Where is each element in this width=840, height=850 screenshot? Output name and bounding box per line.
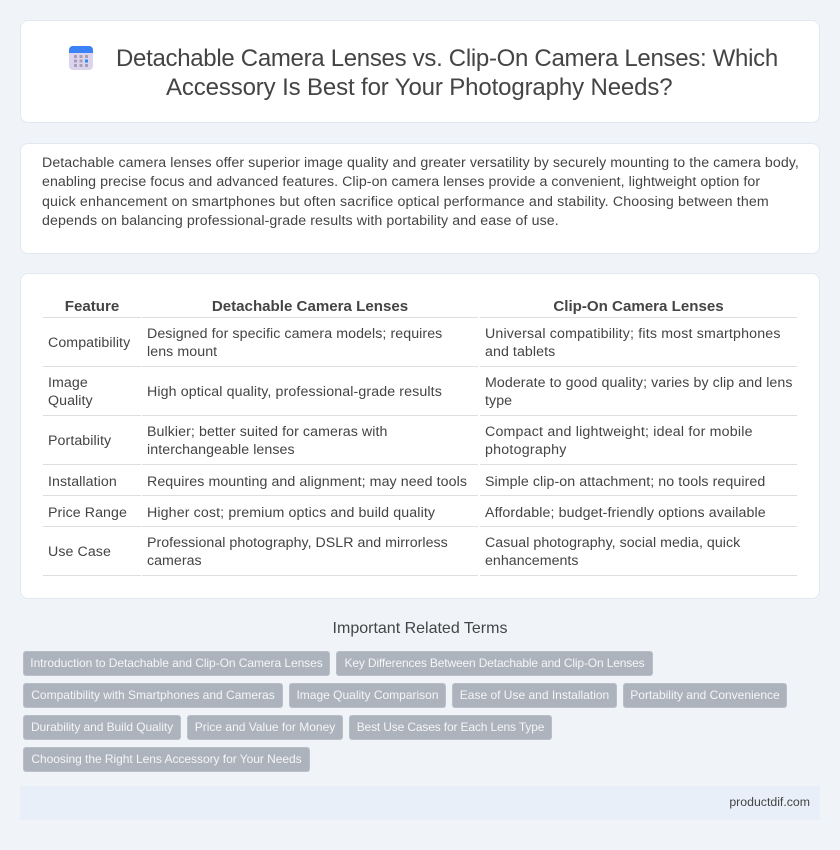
tag bbox=[349, 715, 552, 740]
row: compatibility: Designed for specific camera models; requires bbox=[147, 326, 442, 342]
icon: calendar bbox=[69, 46, 93, 70]
row: use case: Professional photography, DSLR and mirrorless bbox=[147, 535, 448, 551]
row: portability: Bulkier; better suited for cameras with bbox=[147, 424, 387, 440]
table header row: Feature bbox=[65, 298, 119, 315]
comparison table panel bbox=[20, 273, 820, 599]
row: price range bbox=[48, 505, 766, 521]
tag: Ease of Use and Installation bbox=[460, 688, 609, 702]
tag: Durability and Build Quality bbox=[31, 720, 173, 734]
row: image quality bbox=[48, 375, 793, 409]
row: compatibility: Compatibility bbox=[48, 335, 130, 351]
row: image quality: Moderate to good quality; varies by clip and lens bbox=[485, 375, 793, 391]
tag bbox=[23, 683, 283, 708]
row: image quality: Image bbox=[48, 375, 88, 391]
row: use case: Casual photography, social media, quick bbox=[485, 535, 740, 551]
intro text bbox=[42, 155, 799, 229]
row: use case: Use Case bbox=[48, 544, 111, 560]
footer band bbox=[20, 786, 820, 820]
row: price range: Affordable; budget-friendly options available bbox=[485, 505, 766, 521]
title: Detachable Camera Lenses vs. Clip-On Camera Lenses: Which bbox=[116, 45, 778, 72]
tag bbox=[23, 651, 330, 676]
row: portability: Portability bbox=[48, 433, 111, 449]
tag: Compatibility with Smartphones and Cameras bbox=[31, 688, 275, 702]
row: price range: Higher cost; premium optics and build quality bbox=[147, 505, 435, 521]
row: portability bbox=[48, 424, 753, 458]
tag: Portability and Convenience bbox=[630, 688, 780, 702]
row: compatibility: lens mount bbox=[147, 344, 217, 360]
tag: Introduction to Detachable and Clip-On Camera Lenses bbox=[30, 656, 323, 670]
related terms heading: Important Related Terms bbox=[333, 620, 507, 637]
intro text: enabling precise focus and advanced features. Clip-on camera lenses provide a convenient, lightweight option for bbox=[42, 174, 760, 190]
tag bbox=[187, 715, 343, 740]
row: compatibility bbox=[48, 326, 781, 360]
row: installation: Requires mounting and alignment; may need tools bbox=[147, 474, 467, 490]
row: compatibility: and tablets bbox=[485, 344, 555, 360]
intro text: quick enhancement on smartphones but often sacrifice optical performance and stability. Choosing between them bbox=[42, 194, 769, 210]
row: image quality: High optical quality, professional-grade results bbox=[147, 384, 442, 400]
row: portability: interchangeable lenses bbox=[147, 442, 295, 458]
table header row: Clip-On Camera Lenses bbox=[553, 298, 724, 315]
intro text: Detachable camera lenses offer superior image quality and greater versatility by securely mounting to the camera body, bbox=[42, 155, 799, 171]
row: portability: Compact and lightweight; ideal for mobile bbox=[485, 424, 753, 440]
row: compatibility: Universal compatibility; fits most smartphones bbox=[485, 326, 781, 342]
row: use case: enhancements bbox=[485, 553, 579, 569]
row: installation: Simple clip-on attachment; no tools required bbox=[485, 474, 765, 490]
row: installation bbox=[48, 474, 765, 490]
table header row: Detachable Camera Lenses bbox=[212, 298, 408, 315]
tag bbox=[23, 715, 181, 740]
tag bbox=[623, 683, 787, 708]
row: installation: Installation bbox=[48, 474, 117, 490]
intro panel bbox=[20, 143, 820, 254]
related terms tags bbox=[23, 651, 787, 772]
tag bbox=[452, 683, 617, 708]
table header row bbox=[65, 298, 724, 315]
footer source: productdif.com bbox=[729, 795, 810, 809]
title bbox=[116, 45, 778, 101]
tag bbox=[289, 683, 446, 708]
row: use case bbox=[48, 535, 740, 569]
tag: Image Quality Comparison bbox=[296, 688, 439, 702]
tag: Price and Value for Money bbox=[195, 720, 335, 734]
tag: Key Differences Between Detachable and Clip-On Lenses bbox=[344, 656, 644, 670]
row: image quality: Quality bbox=[48, 393, 93, 409]
intro text: depends on balancing professional-grade results with portability and ease of use. bbox=[42, 213, 559, 229]
row: image quality: type bbox=[485, 393, 512, 409]
tag: Choosing the Right Lens Accessory for Your Needs bbox=[31, 752, 302, 766]
tag bbox=[23, 747, 310, 772]
tag: Best Use Cases for Each Lens Type bbox=[357, 720, 544, 734]
header panel bbox=[20, 20, 820, 123]
row: price range: Price Range bbox=[48, 505, 127, 521]
row: use case: cameras bbox=[147, 553, 202, 569]
tag bbox=[336, 651, 653, 676]
row: portability: photography bbox=[485, 442, 567, 458]
title: Accessory Is Best for Your Photography Needs? bbox=[166, 74, 672, 101]
